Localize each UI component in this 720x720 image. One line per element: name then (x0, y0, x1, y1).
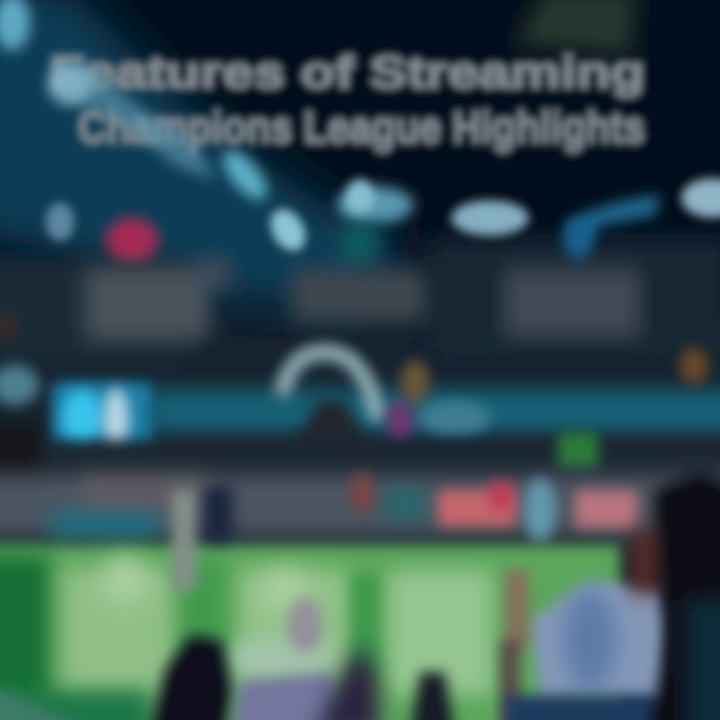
small coloured flags (0, 313, 708, 440)
icon: blue badge (564, 220, 592, 260)
screen: bright scoreboard (52, 382, 152, 452)
spectator: centre dark (315, 645, 380, 720)
stadium teal banner (0, 365, 720, 436)
green flag (558, 432, 598, 468)
spectator: centre with light shirt (232, 672, 345, 720)
crowd band (0, 473, 720, 542)
dark band below banner (0, 440, 720, 466)
tree shape top right (515, 0, 635, 55)
icon: red badge (106, 218, 158, 262)
text block: column one (85, 258, 231, 340)
text block: column two (292, 268, 426, 322)
title (50, 46, 645, 153)
blue light beam highlights (0, 0, 720, 257)
spectators in foreground (150, 472, 720, 720)
standing figure (203, 485, 233, 543)
spectator: tall with blue shirt (530, 580, 670, 700)
text block: column three (503, 268, 641, 338)
pitch (0, 545, 620, 720)
spectator: right of centre (410, 672, 455, 720)
spectator: dark right edge (650, 472, 720, 720)
pale player blur (172, 490, 196, 590)
spectator: left dark (150, 635, 232, 720)
title: Features of Streaming (50, 46, 645, 98)
icon: green badge (340, 220, 380, 264)
dome arch with trophy (282, 352, 378, 445)
